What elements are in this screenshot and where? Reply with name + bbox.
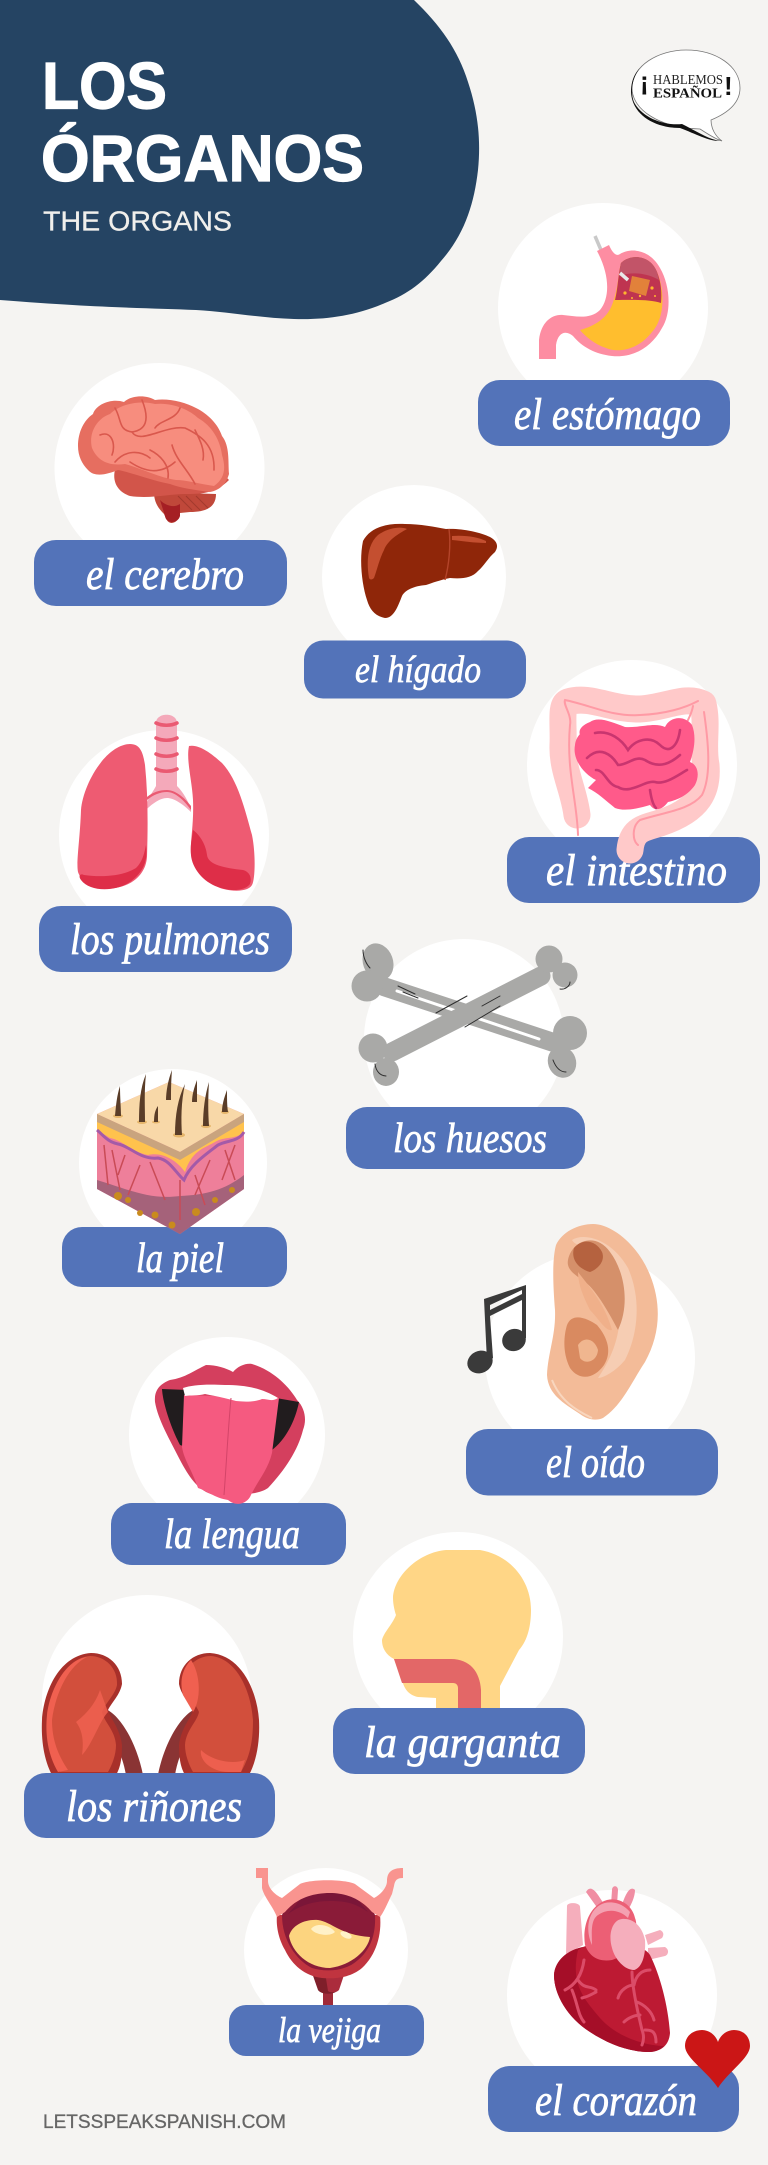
subtitle: THE ORGANS xyxy=(43,206,232,236)
panel: los riñones xyxy=(24,1595,275,1838)
panel: los pulmones xyxy=(39,715,292,972)
title: LOS xyxy=(42,48,167,122)
header blob xyxy=(0,0,479,319)
label: el estómago: el estómago xyxy=(514,390,701,439)
label: los huesos: los huesos xyxy=(393,1116,547,1162)
icon: head and throat xyxy=(382,1550,531,1708)
panel: el estómago xyxy=(478,203,730,446)
label: el oído: el oído xyxy=(546,1438,645,1487)
title xyxy=(41,48,364,195)
panel: la piel xyxy=(62,1069,287,1287)
label: la garganta: la garganta xyxy=(364,1718,561,1767)
panel: el hígado xyxy=(304,485,526,698)
icon: crossed bones xyxy=(352,939,587,1086)
panel: los huesos xyxy=(346,939,587,1169)
label: los huesos xyxy=(346,1107,585,1169)
label: el corazón: el corazón xyxy=(535,2076,697,2125)
label: la piel: la piel xyxy=(136,1236,224,1282)
icon: ear xyxy=(547,1224,658,1420)
logo: speech bubble: ¡ xyxy=(640,66,649,96)
icon: music notes xyxy=(464,1285,530,1377)
icon: brain xyxy=(78,396,229,523)
label: la lengua xyxy=(111,1503,346,1565)
logo: speech bubble: ! xyxy=(724,71,733,101)
panel: el corazón xyxy=(488,1886,750,2132)
label: la vejiga: la vejiga xyxy=(278,2010,381,2050)
panel: el intestino xyxy=(507,660,760,903)
logo: speech bubble xyxy=(631,50,740,141)
icon: red heart xyxy=(685,2030,750,2088)
label: el hígado xyxy=(304,640,526,698)
panel: la lengua xyxy=(111,1337,346,1565)
label: el estómago xyxy=(478,380,730,446)
panel: el oído xyxy=(464,1224,718,1496)
logo: speech bubble: ESPAÑOL xyxy=(653,84,722,102)
label: el intestino xyxy=(507,837,760,903)
icon: stomach xyxy=(539,236,669,359)
label: el oído xyxy=(466,1429,718,1496)
icon: intestines xyxy=(563,700,708,850)
label: la piel xyxy=(62,1227,287,1287)
label: los riñones: los riñones xyxy=(66,1782,242,1831)
label: la vejiga xyxy=(229,2005,424,2056)
label: la lengua: la lengua xyxy=(164,1512,300,1558)
icon: kidneys xyxy=(42,1653,259,1775)
label: el cerebro: el cerebro xyxy=(86,550,244,599)
label: los pulmones xyxy=(39,906,292,972)
label: el cerebro xyxy=(34,540,287,606)
icon: lungs xyxy=(77,715,255,891)
label: los pulmones: los pulmones xyxy=(70,915,270,964)
icon: anatomical heart xyxy=(554,1886,670,2052)
footer: website: LETSSPEAKSPANISH.COM xyxy=(43,2112,286,2133)
panel: la vejiga xyxy=(229,1868,424,2056)
label: los riñones xyxy=(24,1773,275,1838)
icon: skin cross-section xyxy=(97,1070,244,1234)
label: el intestino: el intestino xyxy=(546,846,727,895)
panel: la garganta xyxy=(333,1532,585,1774)
label: el hígado: el hígado xyxy=(355,649,481,691)
title: ÓRGANOS xyxy=(41,121,364,195)
label: el corazón xyxy=(488,2066,739,2132)
icon: tongue and lips xyxy=(155,1364,305,1504)
panel: el cerebro xyxy=(34,363,287,606)
logo: speech bubble: HABLEMOS xyxy=(653,72,723,87)
icon: bladder xyxy=(256,1868,403,2005)
label: la garganta xyxy=(333,1708,585,1774)
icon: liver xyxy=(361,524,497,618)
